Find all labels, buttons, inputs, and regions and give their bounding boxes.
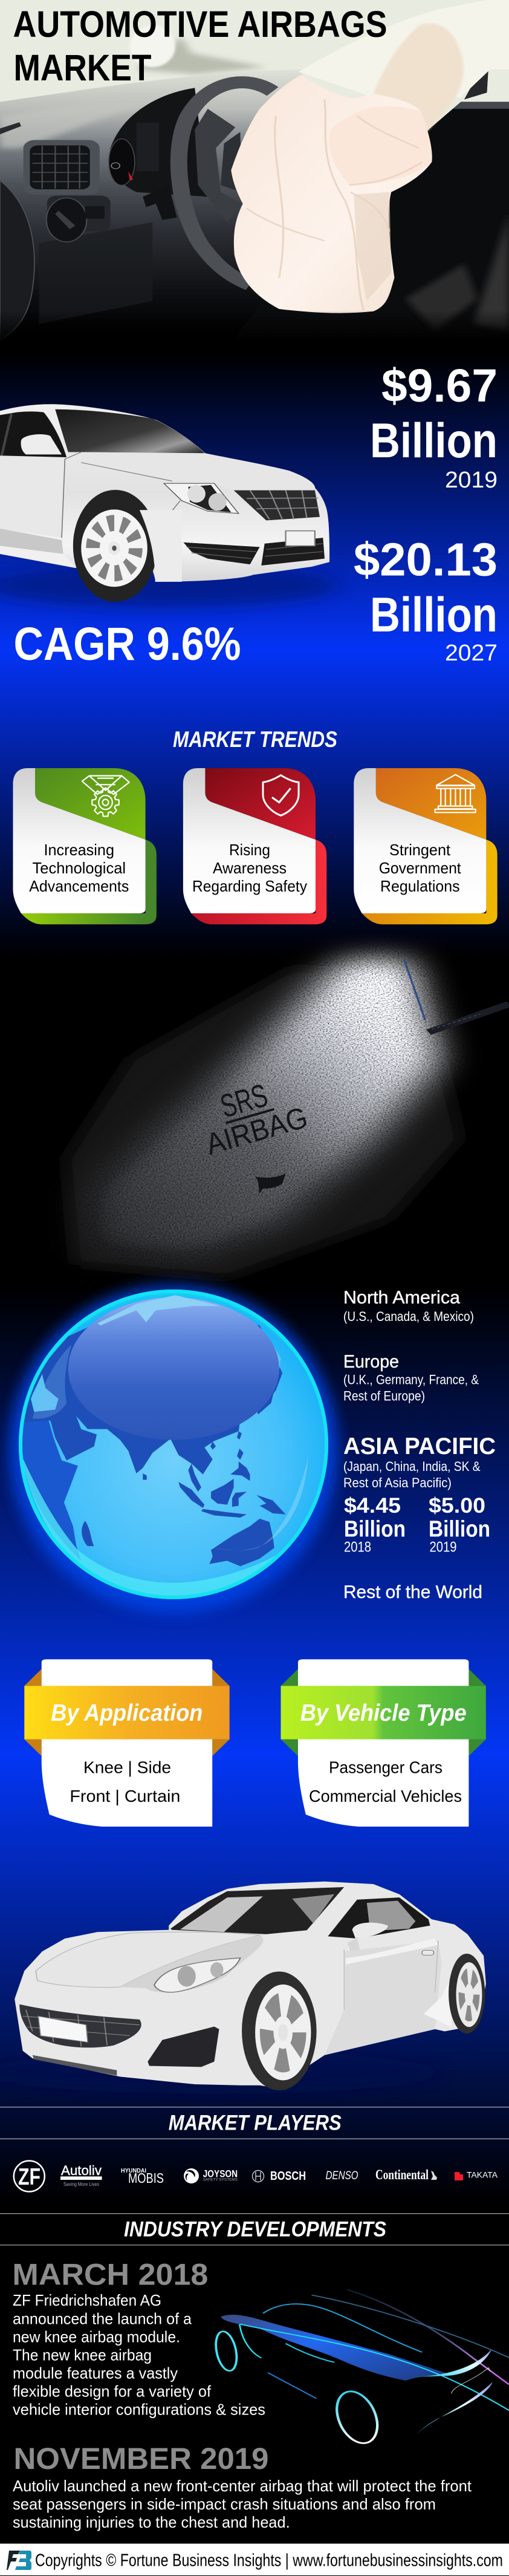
region: Asia Pacific with values: ASIA PACIFIC — [343, 1433, 496, 1459]
icon: Fortune Business Insights logo — [7, 2551, 31, 2570]
card text: Regarding Safety — [192, 877, 307, 895]
card: stringent government regulations — [354, 768, 498, 924]
development: November 2019: sustaining injuries to the chest and head. — [13, 2513, 290, 2531]
logo: ZF: ZF — [18, 2164, 41, 2190]
panel: by vehicle type: By Vehicle Type — [300, 1700, 467, 1726]
card text: Stringent — [389, 841, 451, 859]
development: March 2018: The new knee airbag — [13, 2346, 152, 2364]
region: Asia Pacific with values: $5.00 — [429, 1494, 485, 1518]
region: Rest of the World: Rest of the World — [343, 1582, 482, 1602]
market value 2027: $20.13 — [354, 533, 498, 585]
card: rising awareness regarding safety — [183, 768, 326, 924]
footer: copyright bar — [0, 2544, 509, 2575]
development: March 2018: MARCH 2018 — [12, 2257, 208, 2291]
logo: ZF — [14, 2160, 45, 2192]
icon: government building — [435, 775, 476, 812]
logo: Continental: Continental — [375, 2167, 429, 2182]
market value 2019 — [370, 360, 498, 493]
title — [13, 4, 387, 88]
card text: Rising — [229, 841, 270, 859]
development: March 2018: new knee airbag module. — [13, 2327, 180, 2346]
logo: Autoliv: Autoliv — [61, 2163, 102, 2178]
card text: Technological — [33, 859, 126, 877]
development: March 2018: flexible design for a variety of — [13, 2382, 212, 2400]
icon: shield with check — [263, 775, 299, 815]
heading: industry developments: INDUSTRY DEVELOPMENTS — [124, 2218, 386, 2242]
region: Asia Pacific with values: 2019 — [429, 1539, 457, 1556]
region: Europe: Rest of Europe) — [343, 1389, 425, 1404]
background: upper blue gradient — [0, 339, 509, 958]
development: March 2018: announced the launch of a — [13, 2310, 192, 2328]
title: MARKET — [13, 47, 151, 88]
region: Asia Pacific with values: Billion — [429, 1517, 490, 1542]
logo: Takata — [455, 2170, 498, 2180]
logo: Joyson — [184, 2168, 238, 2183]
title: AUTOMOTIVE AIRBAGS — [13, 4, 387, 45]
CAGR: CAGR 9.6% — [13, 618, 241, 670]
development: November 2019 — [13, 2442, 472, 2531]
logo: Bosch: BOSCH — [270, 2170, 306, 2183]
logo: Joyson: JOYSON — [203, 2168, 238, 2180]
heading: market players: MARKET PLAYERS — [169, 2111, 342, 2135]
region: Asia Pacific with values: $4.45 — [344, 1494, 401, 1518]
region: Europe: Europe — [343, 1352, 399, 1372]
logo: Bosch — [253, 2170, 306, 2183]
development: November 2019: Autoliv launched a new front-center airbag that will protect the front — [13, 2477, 472, 2495]
card text: Government — [379, 859, 461, 877]
card text — [379, 841, 461, 895]
market value 2019: 2019 — [445, 468, 498, 493]
icon: medal with gear — [82, 776, 129, 817]
development: November 2019: NOVEMBER 2019 — [13, 2442, 269, 2476]
region: North America — [343, 1288, 474, 1324]
region: Asia Pacific with values: Rest of Asia Pacific) — [343, 1475, 452, 1490]
panel: by vehicle type — [280, 1659, 486, 1827]
background: black lower band — [0, 2202, 509, 2576]
illustration: white sports car — [0, 1882, 486, 2094]
region: Asia Pacific with values: 2018 — [344, 1539, 371, 1556]
photo: SRS airbag steering wheel leather — [65, 960, 509, 1278]
logo: Autoliv: Saving More Lives — [63, 2182, 99, 2187]
panel: by application — [24, 1659, 230, 1827]
panel: by vehicle type: Commercial Vehicles — [309, 1787, 462, 1805]
region: Asia Pacific with values: Billion — [344, 1517, 406, 1542]
card text: Regulations — [380, 877, 460, 895]
card text — [192, 841, 307, 895]
development: March 2018: vehicle interior configurations & sizes — [13, 2400, 265, 2418]
region: Europe — [343, 1352, 479, 1404]
market value 2027 — [354, 533, 498, 666]
market value 2027: 2027 — [445, 641, 498, 666]
logo: Hyundai Mobis — [121, 2168, 164, 2186]
card text — [29, 841, 129, 895]
illustration: neon concept car lines — [213, 2290, 509, 2445]
panel: by vehicle type: Passenger Cars — [329, 1758, 443, 1777]
logo: Autoliv — [60, 2163, 102, 2187]
background: black band — [0, 957, 509, 1290]
development: March 2018 — [12, 2257, 265, 2418]
card: increasing technological advancements — [13, 768, 157, 924]
card text: Increasing — [44, 841, 114, 859]
panel: by application: Front | Curtain — [70, 1787, 180, 1805]
market value 2019: $9.67 — [381, 360, 498, 412]
logo: Hyundai Mobis: HYUNDAI — [121, 2168, 146, 2174]
illustration: white sedan front — [0, 404, 337, 607]
embossed label: SRS AIRBAG — [193, 1068, 311, 1193]
region: Asia Pacific with values: (Japan, China, India, SK & — [343, 1459, 481, 1474]
region: Asia Pacific with values — [343, 1433, 496, 1556]
embossed label: SRS AIRBAG: AIRBAG — [203, 1101, 311, 1161]
region: Europe: (U.K., Germany, France, & — [343, 1372, 479, 1387]
logo: Joyson: SAFETY SYSTEMS — [203, 2179, 238, 2182]
panel: by application: By Application — [51, 1700, 203, 1726]
globe with Asia Pacific map — [9, 1285, 338, 1614]
panel: by application: Knee | Side — [83, 1758, 171, 1777]
embossed label: SRS AIRBAG: SRS — [216, 1077, 271, 1125]
development: November 2019: seat passengers in side-impact crash situations and also from — [13, 2495, 436, 2513]
logo: Takata: TAKATA — [467, 2170, 498, 2180]
region: North America: (U.S., Canada, & Mexico) — [343, 1309, 474, 1324]
card text: Advancements — [29, 877, 129, 895]
logo: Hyundai Mobis: MOBIS — [128, 2170, 164, 2186]
logo: Denso: DENSO — [326, 2170, 358, 2182]
heading: market trends: MARKET TRENDS — [173, 727, 337, 752]
development: March 2018: ZF Friedrichshafen AG — [13, 2291, 161, 2309]
development: March 2018: module features a vastly — [13, 2364, 178, 2382]
region: North America: North America — [343, 1288, 460, 1308]
logos: market players — [14, 2160, 498, 2192]
card text: Awareness — [213, 859, 287, 877]
background: lower blue gradient — [0, 1288, 509, 2203]
hero photo: deployed airbag inside car — [0, 0, 509, 364]
